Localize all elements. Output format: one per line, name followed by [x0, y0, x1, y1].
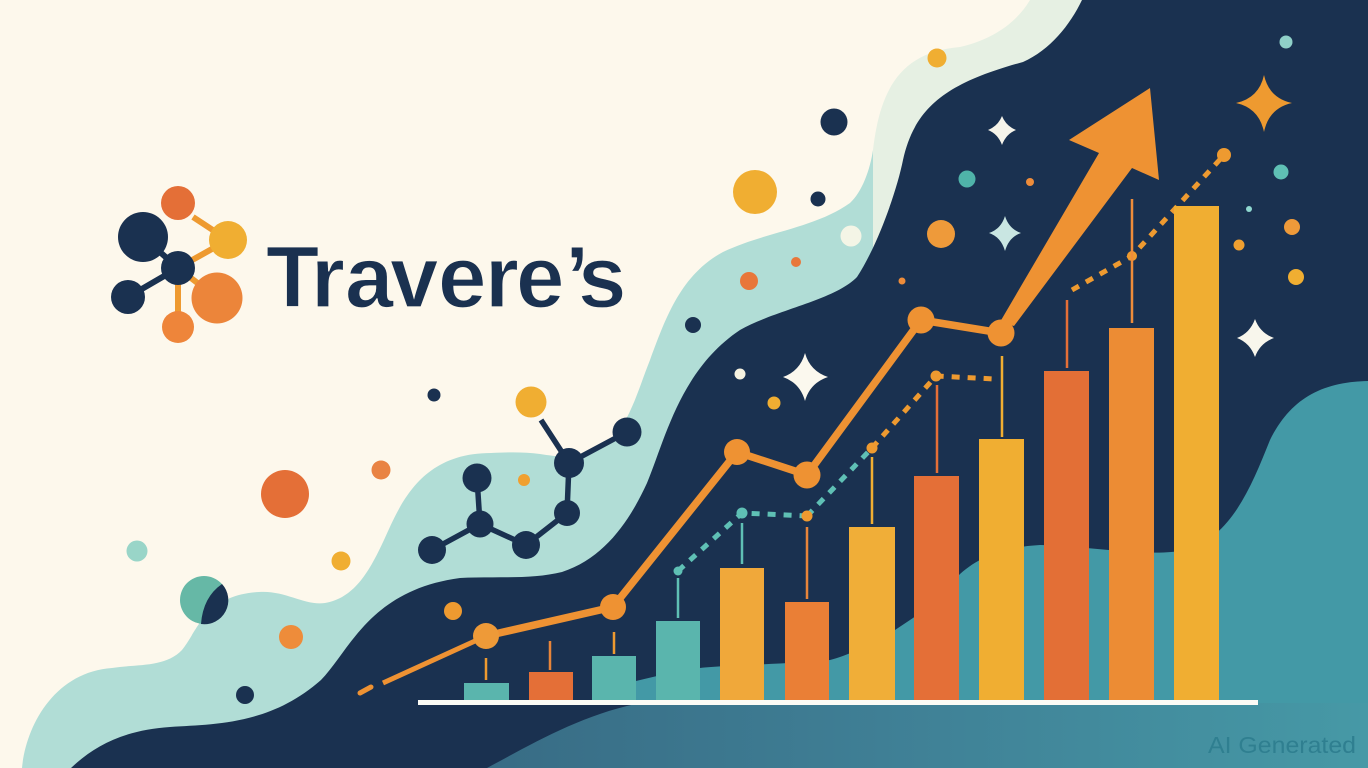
- decorative dots: left and upper area: [126, 48, 946, 704]
- main orange trend arrow: [360, 88, 1159, 693]
- molecule: center: [418, 418, 642, 564]
- two-tone circle: [180, 576, 228, 624]
- watermark: AI Generated: [1208, 732, 1356, 758]
- pale green wave: [873, 0, 1100, 300]
- sparkles: [783, 75, 1292, 401]
- chart baseline: [418, 700, 1258, 705]
- light teal wave: [22, 150, 873, 768]
- decorative dots: navy area: [734, 36, 1304, 410]
- dashed trend line: orange: [872, 155, 1224, 448]
- bar chart: [464, 199, 1219, 700]
- logo icon: molecule: [111, 186, 247, 343]
- teal foreground wave: [636, 381, 1368, 705]
- lower floor shade: [487, 703, 1368, 768]
- dashed trend line: teal: [678, 448, 872, 571]
- title: Travere’s: [266, 229, 626, 326]
- bars: [464, 683, 509, 700]
- trend markers: [674, 148, 1231, 576]
- bar whiskers: [486, 199, 1132, 680]
